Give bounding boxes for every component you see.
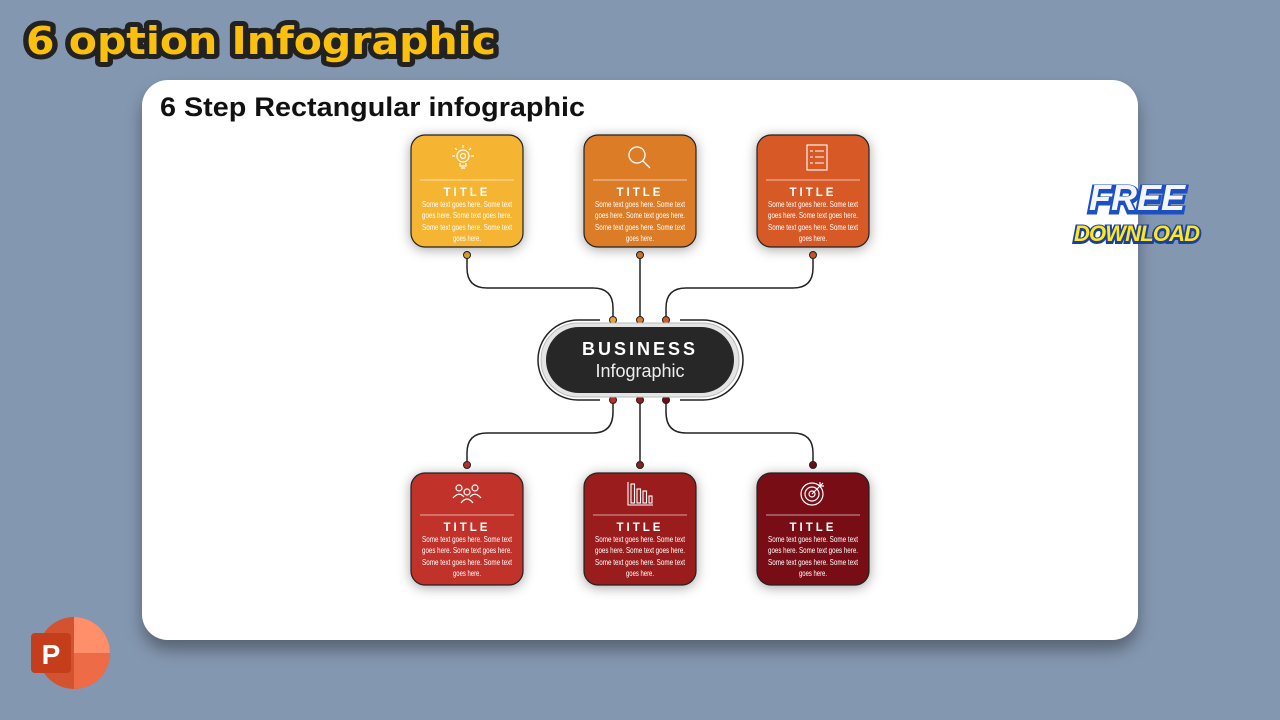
card 2: Some text goes here. Some text (595, 199, 686, 209)
card 6 (757, 473, 869, 585)
card 3: goes here. (799, 233, 827, 243)
card 5: goes here. (626, 568, 654, 578)
card 3: Some text goes here. Some text (768, 222, 859, 232)
center hub: BUSINESS (582, 339, 698, 359)
card 4: goes here. (453, 568, 481, 578)
card 1: Some text goes here. Some text (422, 199, 513, 209)
card 4: Some text goes here. Some text (422, 534, 513, 544)
free download badge: DOWNLOAD (1074, 221, 1200, 246)
card 2: goes here. (626, 233, 654, 243)
card 5 (584, 473, 696, 585)
icon: bar chart (628, 482, 653, 505)
card 1: goes here. (453, 233, 481, 243)
card 4 (411, 473, 523, 585)
card 3: goes here. Some text goes here. (768, 210, 858, 220)
free download badge: FREE (1089, 179, 1186, 220)
card 1 (411, 135, 523, 247)
card 5: TITLE (617, 522, 663, 534)
panel heading: 6 Step Rectangular infographic (160, 92, 585, 122)
card 6: Some text goes here. Some text (768, 534, 859, 544)
main title: 6 option Infographic (26, 19, 496, 63)
card 6: Some text goes here. Some text (768, 557, 859, 567)
card 3 (757, 135, 869, 247)
card 2: Some text goes here. Some text (595, 222, 686, 232)
card 6: goes here. (799, 568, 827, 578)
card 5: Some text goes here. Some text (595, 534, 686, 544)
card 5: goes here. Some text goes here. (595, 545, 685, 555)
icon: people (453, 485, 481, 503)
card 4: TITLE (444, 522, 490, 534)
card 1: goes here. Some text goes here. (422, 210, 512, 220)
icon: magnifier (629, 147, 650, 168)
main title: 6 option Infographic (26, 19, 496, 63)
card 3: Some text goes here. Some text (768, 199, 859, 209)
card 5: Some text goes here. Some text (595, 557, 686, 567)
card 6: TITLE (790, 522, 836, 534)
center hub (538, 320, 743, 400)
card 1: TITLE (444, 187, 490, 199)
free download badge (1074, 177, 1200, 247)
icon: powerpoint logo: P (42, 639, 60, 670)
icon: light bulb (452, 145, 474, 168)
center hub: Infographic (595, 361, 685, 381)
icon: checklist (807, 145, 827, 170)
card 3: TITLE (790, 187, 836, 199)
card 2: TITLE (617, 187, 663, 199)
connectors (467, 255, 813, 465)
card 2: goes here. Some text goes here. (595, 210, 685, 220)
free download badge: DOWNLOAD (1074, 222, 1200, 247)
icon: target (801, 482, 824, 505)
card 6: goes here. Some text goes here. (768, 545, 858, 555)
white panel (142, 80, 1138, 640)
card 2 (584, 135, 696, 247)
card 1: Some text goes here. Some text (422, 222, 513, 232)
card 4: Some text goes here. Some text (422, 557, 513, 567)
icon: powerpoint logo (31, 617, 110, 689)
connector dots (464, 252, 816, 468)
card 4: goes here. Some text goes here. (422, 545, 512, 555)
free download badge: FREE (1089, 177, 1186, 218)
